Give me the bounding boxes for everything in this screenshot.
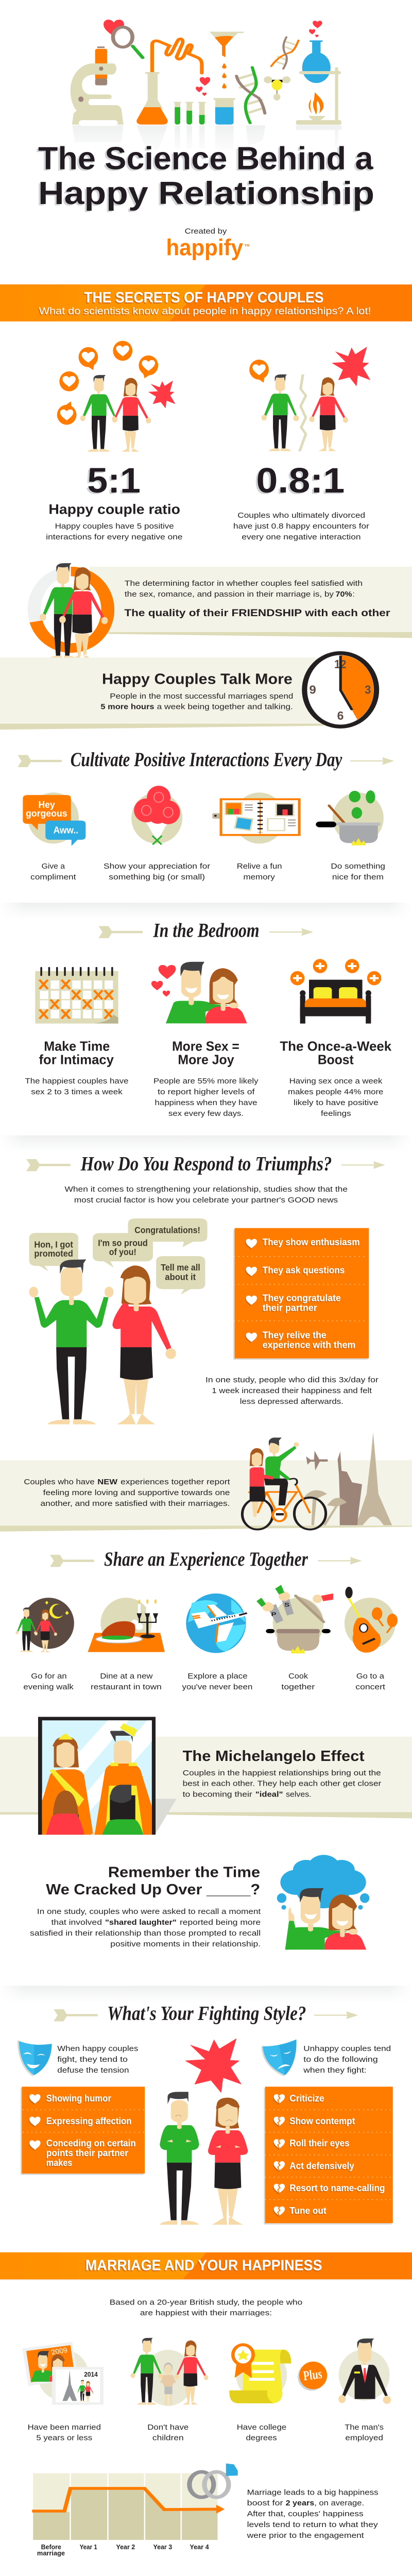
text: make time for intimacy: Make Time [44,1039,110,1054]
icon: clock: 6 [337,709,344,722]
icon: clock [304,653,376,726]
axis labels: marriage [37,2550,65,2557]
list text: They congratulate [263,1293,341,1303]
intro text: most crucial factor is how you celebrate your partner's GOOD news [74,1196,338,1204]
remember text: reported being more [180,1918,261,1926]
icon: sad mask [261,2039,297,2076]
remember text: "shared laughter" [105,1918,177,1926]
figure: woman congratulating [112,1265,176,1425]
man [160,2092,199,2225]
captions: Give a [42,862,65,870]
list text: their partner [263,1302,317,1313]
stat: 0.8:1: 0.8:1 [256,461,345,500]
icon: test tubes [174,102,206,125]
list text: Tune out [289,2205,327,2216]
panel: shared laughter [0,1855,412,2225]
list text: Expressing affection [46,2115,132,2126]
captions: Do something [331,862,385,870]
icon: funnel and beaker [210,32,244,125]
michelangelo text: selves. [286,1790,312,1799]
captions: 5 years or less [36,2433,92,2442]
panel: friendship [34,563,412,659]
icon: calendar [35,968,118,1024]
captions: employed [345,2433,383,2442]
logo: happify: TM [244,243,250,247]
captions: Cook [288,1672,308,1681]
icon: thought cloud and laughing couple [277,1855,369,1950]
chart explanation text [247,2488,379,2539]
panel: chart and money [0,2422,412,2576]
icon: diploma [229,2343,291,2403]
new experiences text: feeling more loving and supportive towards one [43,1488,230,1497]
axis labels [37,2544,209,2557]
icon: clock: 9 [310,683,316,696]
orange list: responses [233,1228,369,1360]
friendship text [124,579,390,618]
chart explanation text: Marriage leads to a big happiness [247,2488,379,2497]
text: once a week boost: likely to have positive [294,1098,379,1107]
captions: children [152,2433,184,2442]
text: make time for intimacy: for Intimacy [39,1052,114,1067]
axis labels: Before [41,2544,61,2551]
heading with arrows [98,919,313,942]
list text: makes [46,2157,72,2168]
remember text: that involved [51,1918,102,1926]
list text: They ask questions [263,1265,345,1276]
text: more sex more joy: to report higher levels of [158,1088,254,1096]
text: more sex more joy: More Joy [178,1052,234,1067]
new experiences text: another, and more satisfied with their marriages. [41,1499,230,1507]
list hearts [29,2094,41,2150]
chart explanation text: boost for [247,2499,283,2507]
icon: evening walk [15,1598,74,1652]
captions [28,2422,384,2442]
speech bubbles: Congratulations! [134,1225,200,1235]
divorced couple text: have just 0.8 happy encounters for [233,522,369,530]
illustration: couple on bicycle [242,1437,326,1530]
list text [289,2093,385,2216]
banner: the secrets of happy couples [0,284,412,321]
icon: clock: 12 [334,657,346,671]
icon: happy mask [18,2040,52,2076]
list text: experience with them [263,1340,355,1350]
speech bubbles: Hon, I got [34,1240,73,1250]
new experiences text [24,1478,230,1507]
chart explanation text: After that, couples' happiness [247,2510,364,2518]
text: once a week boost: Boost [318,1052,354,1067]
panel: triumphs conversation [0,1218,412,1532]
friendship text: the sex, romance, and passion in their marriage is, by [125,590,334,598]
remember text [30,1865,261,1948]
study text: less depressed afterwards. [240,1397,344,1405]
panel: happy couples talk more [0,653,376,730]
icon: microscope [71,46,124,126]
list text: Showing humor [46,2093,111,2104]
friendship text: : [353,590,355,598]
list text: They relive the [263,1330,327,1341]
reflection of lab equipment [72,125,341,152]
heading with arrows: In the Bedroom [153,919,260,942]
text: more sex more joy: happiness when they have [155,1098,258,1107]
captions: Dine at a new [100,1672,153,1681]
icon: speech bubbles: Hey [38,799,55,810]
text: more sex more joy: People are 55% more likely [153,1077,259,1085]
title [38,140,374,211]
figures: couple with crossed arms [0,2092,412,2406]
icon: plus badge [298,2362,327,2391]
icon: bouquet [131,786,182,844]
icon: magnifying glass and heart [104,20,143,58]
orange list: happy fights [21,2087,145,2175]
happy couples text: When happy couples [57,2044,138,2053]
text: once a week boost: feelings [321,1109,351,1117]
icon: guitar and maracas [345,1587,398,1653]
illustration: divorced couple with crack [249,347,370,451]
captions: Go for an [31,1672,67,1681]
remember text: positive moments in their relationship. [110,1940,261,1948]
study text: In one study, people who did this 3x/day for [205,1376,379,1384]
captions [30,862,385,882]
intro text: When it comes to strengthening your relationship, studies show that the [65,1185,348,1193]
friendship text: The determining factor in whether couples feel satisfied with [125,579,363,588]
unhappy couples text: when they fight: [303,2066,367,2074]
captions: Don't have [147,2422,188,2431]
icon: globe with plane [186,1594,247,1653]
intro text: Based on a 20-year British study, the people who [110,2298,302,2307]
study text: 1 week increased their happiness and felt [212,1386,372,1395]
orange list: unhappy fights [264,2087,393,2225]
speech bubbles: promoted [34,1249,73,1259]
icon: couple in ring [34,563,108,659]
speech bubbles: Tell me all [161,1263,200,1273]
banner: marriage and your happiness [0,2252,412,2280]
captions: Go to a [356,1672,384,1681]
text: make time for intimacy: The happiest couples have [25,1077,129,1085]
icon: hearts [196,77,210,96]
icon: photos 2009 and 2014: 2009 [50,2346,68,2357]
talk more text: Happy Couples Talk More [102,671,293,687]
list broken hearts [274,2094,285,2216]
icon: dinner [88,1598,165,1652]
icon: cooking pot [316,790,384,845]
icon: couple without children [131,2338,209,2406]
list text [46,2093,136,2168]
rings [190,2463,238,2497]
michelangelo text: Couples in the happiest relationships bring out the [183,1768,381,1777]
woman [208,2097,248,2225]
captions: The man's [345,2422,384,2431]
new experiences text: experiences together report [121,1478,230,1486]
text: make time for intimacy: sex 2 to 3 times a week [31,1088,123,1096]
icon: bed [290,959,381,1024]
captions: evening walk [23,1683,74,1691]
hero panel [0,20,412,321]
list text [263,1237,359,1350]
panel: new experiences [0,1432,412,1532]
chart: happiness over time [32,2463,238,2557]
panel background [0,657,331,730]
axis labels: Year 4 [190,2544,209,2551]
icon: clock: 3 [365,683,371,696]
panel: in the bedroom [0,903,412,1204]
captions: Show your appreciation for [104,862,210,870]
michelangelo text: best in each other. They help each other get closer [183,1779,381,1788]
michelangelo text: to becoming their [183,1790,252,1799]
captions: memory [243,873,275,882]
study text [205,1376,379,1405]
friendship text: 70% [336,590,352,598]
speech bubbles: about it [165,1272,196,1282]
text: make time for intimacy [25,1039,129,1096]
divorced couple text: every one negative interaction [242,533,361,541]
talk more text [100,671,293,711]
captions: Relive a fun [237,862,282,870]
captions: restaurant in town [91,1683,162,1691]
icon: flask with coiled tube [136,39,202,125]
icon: DNA helix [236,67,265,123]
captions: Have been married [28,2422,101,2431]
icon: speech bubbles [23,792,85,846]
chart explanation text: levels tend to return to what they [247,2520,378,2529]
divorced couple text: Couples who ultimately divorced [237,511,365,519]
happy couples text: fight, they tend to [57,2055,128,2063]
divorced couple text [233,511,369,541]
list text: Criticize [289,2093,324,2104]
text: more sex more joy [153,1039,259,1117]
icon: smiling couple with hearts [151,962,247,1023]
list text: They show enthusiasm [263,1237,359,1247]
happy couple ratio text: interactions for every negative one [46,533,183,541]
icon: molecule [264,76,290,100]
icon: cook together: S [284,1601,289,1608]
illustration: happy couple with five hearts and one burst [57,341,176,452]
list text: Conceding on certain [46,2138,136,2148]
panel: share an experience together [0,1548,412,1835]
happy couple ratio text: Happy couple ratio [48,501,180,517]
icon: photo album [212,792,299,843]
captions: you've never been [182,1683,252,1691]
list text: points their partner [46,2147,128,2158]
icon: photos 2009 and 2014: 2014 [84,2371,98,2378]
happy couple ratio text: Happy couples have 5 positive [55,522,174,530]
intro text: are happiest with their marriages: [140,2309,272,2317]
michelangelo text: The Michelangelo Effect [183,1748,365,1765]
list text: Show contempt [289,2115,355,2126]
michelangelo text [183,1748,381,1799]
captions: degrees [246,2433,277,2442]
logo: happify: happify [166,235,243,260]
text: once a week boost: Having sex once a week [289,1077,382,1085]
unhappy couples text [303,2044,391,2074]
created by: Created by [185,227,227,235]
new experiences text: Couples who have [24,1478,95,1486]
icon: employed man in suit [338,2338,391,2404]
axis labels: Year 1 [80,2544,97,2551]
captions [23,1672,385,1691]
happy couples text [57,2044,138,2074]
remember text: In one study, couples who were asked to recall a moment [37,1907,261,1916]
panel: michelangelo effect [0,1717,412,1835]
icon: cook together: P [271,1611,277,1617]
axis labels: Year 3 [153,2544,172,2551]
talk more text: People in the most successful marriages spend [110,691,293,700]
chart explanation text: , on average. [314,2499,364,2507]
text: more sex more joy: More Sex = [172,1039,239,1054]
captions: Have college [237,2422,286,2431]
list hearts [246,1239,257,1342]
icon: photos 2009 and 2014 [22,2342,104,2405]
list text: Roll their eyes [289,2138,350,2148]
icon: burst [185,2038,242,2093]
captions: compliment [30,873,76,882]
text: once a week boost: makes people 44% more [288,1088,383,1096]
captions: something big (or small) [109,873,205,882]
icon: cook together [256,1585,333,1653]
captions: together [281,1683,315,1691]
remember text: We Cracked Up Over _____? [46,1882,260,1898]
panel background [89,567,412,638]
mirror illustration [38,1717,156,1835]
panel: cultivate positive interactions [18,749,394,882]
stat: 5:1: 5:1 [87,461,141,500]
panel: happy vs divorced ratio [39,305,371,541]
speech bubbles: I'm so proud [98,1238,148,1248]
unhappy couples text: to do the following [303,2055,378,2063]
talk more text: 5 more hours [100,702,154,711]
text: once a week boost [280,1039,392,1117]
happy couples text: defuse the tension [57,2066,129,2074]
axis labels: Year 2 [116,2544,135,2551]
michelangelo text: "ideal" [255,1790,283,1799]
icon: speech bubbles: gorgeous [26,808,67,819]
icon: small DNA [271,37,299,69]
illustration: landmarks [302,1432,392,1525]
figure: man cheering [29,1259,113,1425]
chart explanation text: were prior to the engagement [247,2531,364,2539]
captions: concert [355,1683,385,1691]
captions: nice for them [332,873,384,882]
captions: Explore a place [187,1672,248,1681]
icon: blue flask on burner [296,21,341,125]
happy couple ratio text [46,501,183,541]
unhappy couples text: Unhappy couples tend [303,2044,391,2053]
new experiences text: NEW [97,1478,117,1486]
intro text [110,2298,302,2317]
icon: plus badge: Plus [301,2366,323,2383]
talk more text: a week being together and talking. [157,702,293,711]
list text: Act defensively [289,2160,354,2171]
text: more sex more joy: sex every few days. [168,1109,244,1117]
trend line [32,2488,225,2514]
remember text: satisfied in their relationship than those prompted to recall [30,1929,261,1937]
remember text: Remember the Time [108,1865,260,1880]
icon: speech bubbles: Aww.. [54,825,78,836]
intro text [65,1185,348,1204]
speech bubbles: of you! [109,1247,136,1257]
speech bubbles [29,1218,208,1295]
chart explanation text: 2 years [286,2499,314,2507]
